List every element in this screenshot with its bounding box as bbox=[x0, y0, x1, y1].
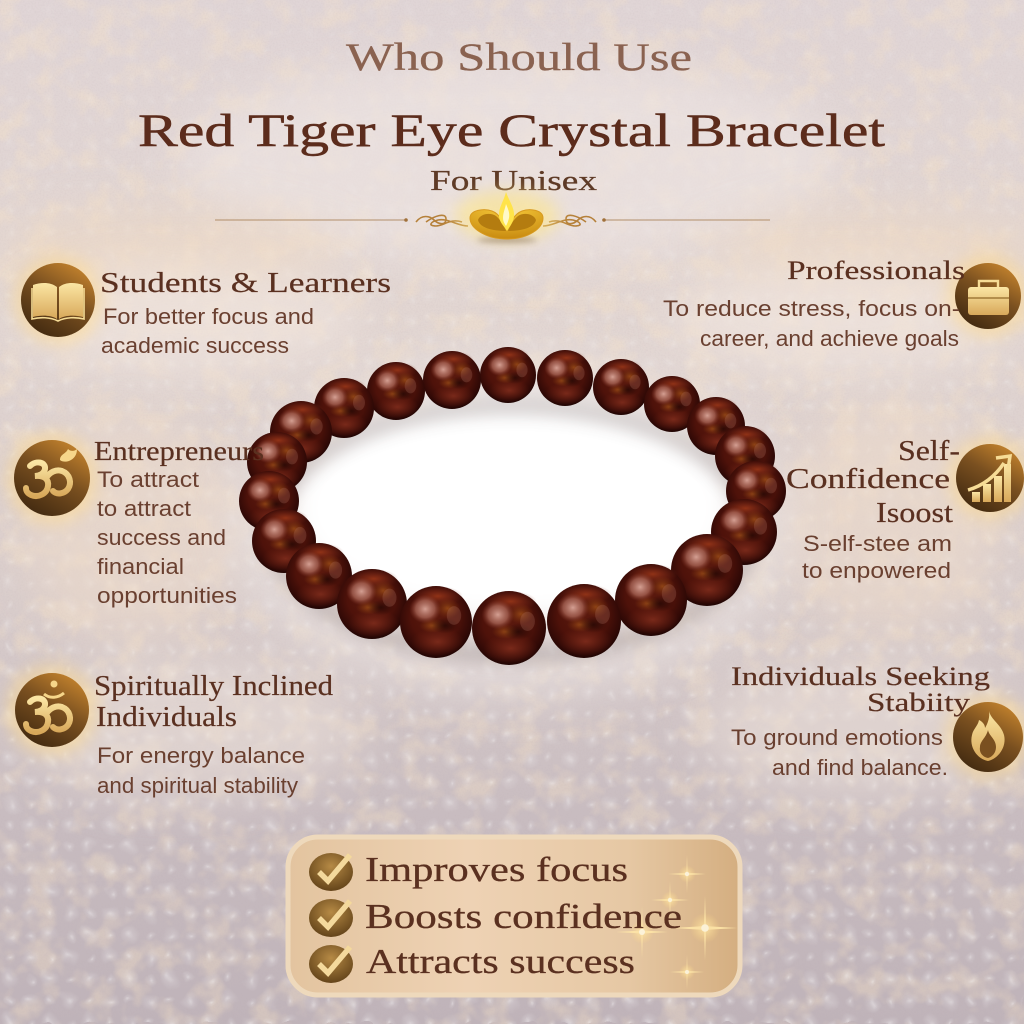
panel: professionals bbox=[663, 254, 1024, 351]
panel: benefits checklist bbox=[288, 837, 740, 995]
check item: improves focus bbox=[309, 850, 628, 891]
panel: individuals seeking stability bbox=[731, 662, 1024, 780]
description: opportunities bbox=[97, 583, 237, 608]
description bbox=[97, 743, 305, 798]
panel: self-confidence bbox=[786, 436, 1024, 583]
description: to enpowered bbox=[802, 558, 951, 583]
heading bbox=[94, 671, 333, 733]
check item: attracts success bbox=[309, 942, 635, 983]
description bbox=[101, 304, 314, 358]
heading: Professionals bbox=[787, 256, 965, 285]
check item: boosts confidence: Boosts confidence bbox=[365, 897, 682, 936]
description bbox=[97, 467, 237, 608]
icon: om symbol bbox=[6, 432, 98, 524]
heading: Confidence bbox=[786, 464, 950, 495]
check item: attracts success: Attracts success bbox=[366, 942, 635, 981]
description: S-elf-stee am bbox=[803, 531, 952, 556]
description: For energy balance bbox=[97, 743, 305, 768]
description: academic success bbox=[101, 333, 289, 358]
heading: Self- bbox=[898, 436, 960, 467]
description bbox=[663, 296, 960, 351]
heading: Individuals Seeking bbox=[731, 662, 990, 691]
icon: open book bbox=[13, 255, 103, 345]
description: To reduce stress, focus on- bbox=[663, 296, 960, 321]
heading bbox=[731, 662, 990, 717]
description: For better focus and bbox=[103, 304, 314, 329]
description: success and bbox=[97, 525, 226, 550]
icon: om symbol bbox=[6, 664, 98, 756]
description bbox=[731, 725, 948, 780]
description: to attract bbox=[97, 496, 191, 521]
heading: Students & Learners bbox=[100, 268, 391, 299]
icon: flame bbox=[945, 694, 1024, 780]
bracelet bbox=[232, 347, 792, 695]
panel: spiritually inclined bbox=[6, 664, 333, 798]
heading: Spiritually Inclined bbox=[94, 671, 333, 702]
title: Red Tiger Eye Crystal Bracelet bbox=[138, 105, 885, 157]
description: To attract bbox=[97, 467, 199, 492]
description: financial bbox=[97, 554, 184, 579]
description: career, and achieve goals bbox=[700, 326, 959, 351]
check item: boosts confidence bbox=[309, 897, 682, 937]
description bbox=[802, 531, 952, 583]
white center plate bbox=[292, 396, 732, 620]
heading: who should use: Who Should Use bbox=[346, 36, 692, 79]
sparkles bbox=[616, 855, 737, 989]
description: and spiritual stability bbox=[97, 773, 298, 798]
description: To ground emotions bbox=[731, 725, 943, 750]
heading: Stabiity bbox=[867, 688, 970, 717]
panel: entrepreneurs bbox=[6, 432, 264, 608]
divider with oil lamp bbox=[215, 190, 770, 243]
heading: Isoost bbox=[876, 498, 953, 529]
subtitle: For Unisex bbox=[430, 165, 598, 197]
icon: briefcase bbox=[946, 254, 1024, 338]
icon: rising chart bbox=[948, 436, 1024, 520]
heading bbox=[786, 436, 960, 529]
heading: Entrepreneurs bbox=[94, 436, 264, 466]
panel: students and learners bbox=[13, 255, 391, 358]
check item: improves focus: Improves focus bbox=[365, 850, 628, 889]
description: and find balance. bbox=[772, 755, 948, 780]
heading: Individuals bbox=[96, 702, 237, 733]
